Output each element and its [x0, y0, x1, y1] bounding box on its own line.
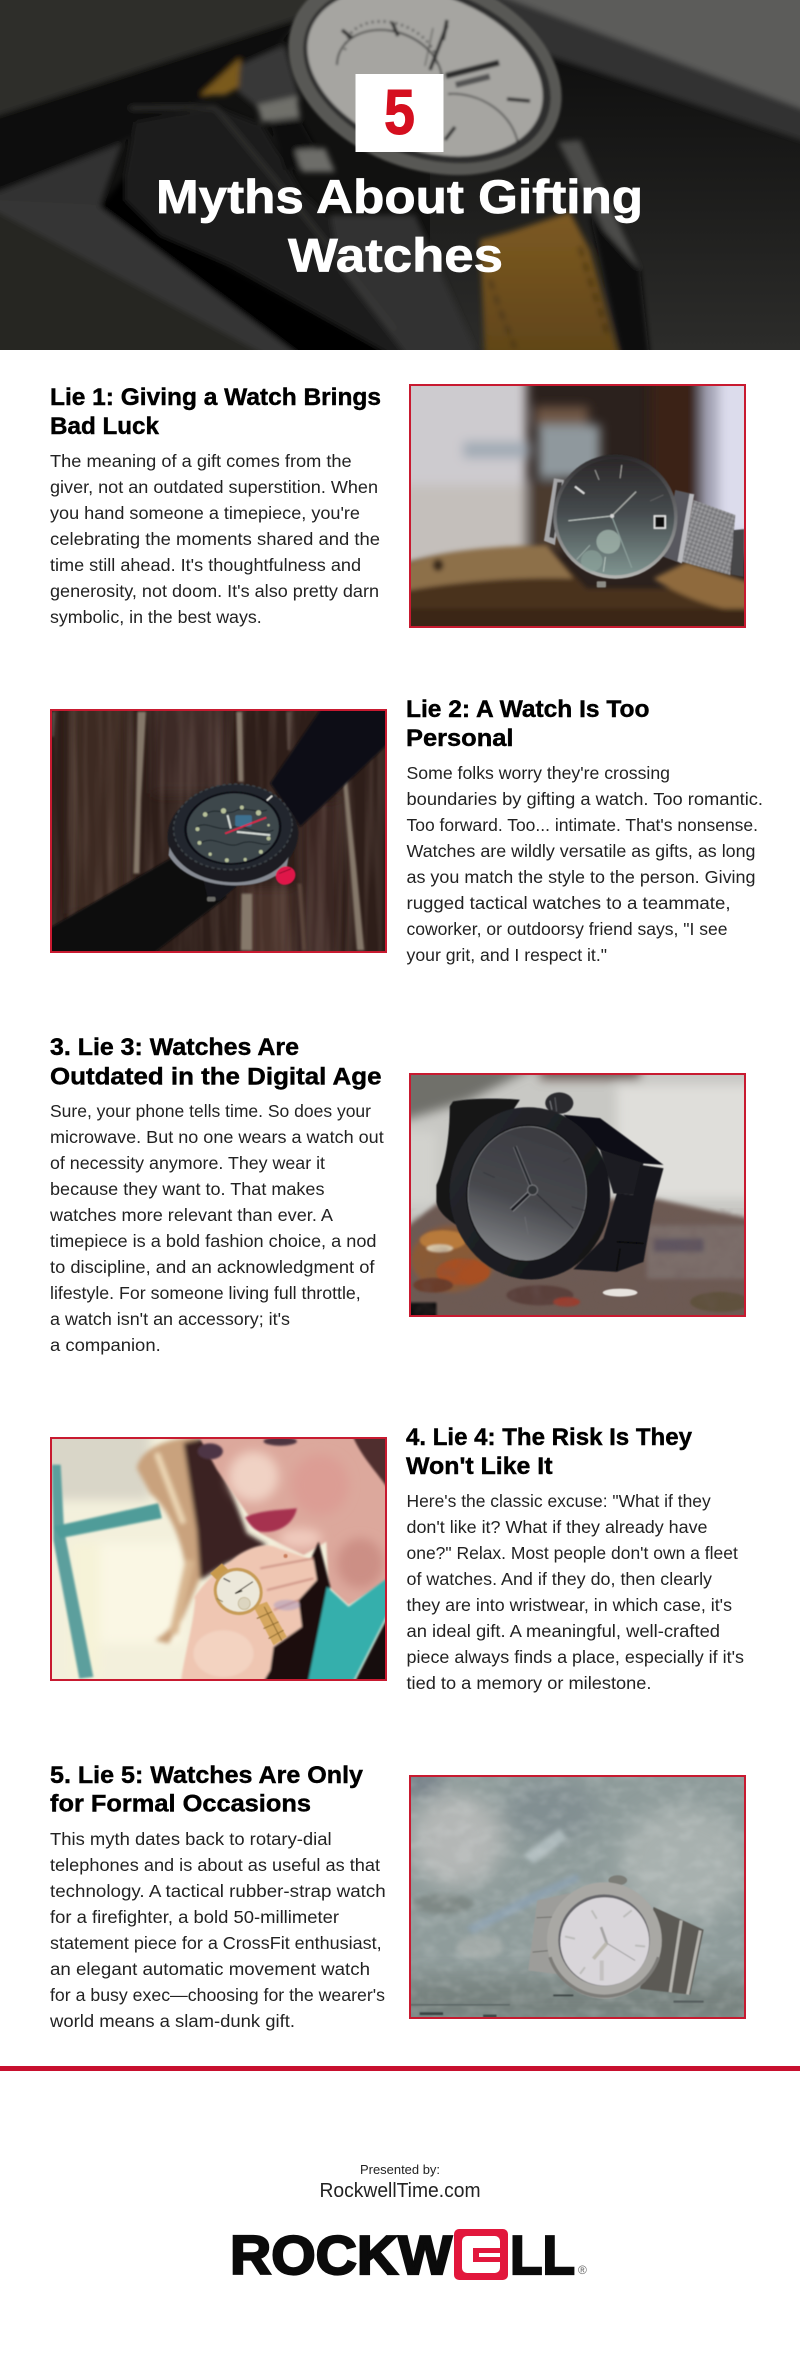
body text: lie 3 [49, 1101, 384, 1355]
body text: lie 3: microwave. But no one wears a watch out [50, 1127, 384, 1147]
heading: lie 2: Lie 2: A Watch Is Too [406, 696, 650, 723]
heading: lie 4: Won't Like It [406, 1453, 552, 1480]
heading: lie 5: 5. Lie 5: Watches Are Only [50, 1762, 363, 1789]
body text: lie 4: one?" Relax. Most people don't own a fleet [406, 1543, 738, 1563]
body text: lie 5: This myth dates back to rotary-dial [50, 1829, 332, 1849]
body text: lie 5: for a firefighter, a bold 50-millimeter [50, 1907, 339, 1927]
logo: Rockwell: ROCKW [230, 2224, 452, 2286]
heading: lie 2 [406, 696, 650, 752]
photo: tactical watch on dark wood [50, 709, 387, 953]
heading: lie 5: for Formal Occasions [50, 1790, 311, 1818]
title [156, 170, 643, 282]
panel: lie 3 [49, 1034, 757, 1355]
heading: lie 1: Lie 1: Giving a Watch Brings [50, 384, 381, 411]
body text: lie 1: The meaning of a gift comes from the [50, 451, 352, 471]
body text: lie 2: boundaries by gifting a watch. Too romantic. [406, 789, 763, 809]
body text: lie 5: technology. A tactical rubber-strap watch [50, 1881, 386, 1901]
heading: lie 3: Outdated in the Digital Age [50, 1064, 381, 1090]
body text: lie 2: Some folks worry they're crossing [406, 763, 670, 783]
photo: woman wearing gold watch [50, 1437, 387, 1681]
body text: lie 2: rugged tactical watches to a teammate, [406, 893, 730, 913]
body text: lie 1: celebrating the moments shared and the [50, 529, 380, 549]
body text: lie 3: of necessity anymore. They wear it [50, 1153, 325, 1173]
body text: lie 2 [406, 763, 763, 965]
body text: lie 3: a companion. [50, 1335, 161, 1355]
body text: lie 3: watches more relevant than ever. A [49, 1205, 333, 1225]
heading: lie 3 [50, 1034, 381, 1090]
logo: Rockwell: LL [510, 2224, 575, 2286]
heading: lie 1 [50, 384, 381, 440]
body text: lie 2: your grit, and I respect it." [406, 945, 607, 965]
photo: black watch on rusty stone [409, 1073, 746, 1317]
body text: lie 4: don't like it? What if they already have [406, 1517, 708, 1537]
body text: lie 5 [49, 1829, 386, 2031]
heading: lie 4 [406, 1424, 692, 1480]
body text: lie 3: a watch isn't an accessory; it's [50, 1309, 290, 1329]
heading: lie 3: 3. Lie 3: Watches Are [50, 1034, 299, 1061]
body text: lie 4 [406, 1491, 744, 1693]
presented by: Presented by: [360, 2162, 440, 2177]
heading: lie 4: 4. Lie 4: The Risk Is They [406, 1424, 692, 1451]
panel: footer [230, 2162, 587, 2286]
heading: lie 5 [50, 1762, 363, 1818]
body text: lie 1: you hand someone a timepiece, you're [50, 503, 360, 523]
body text: lie 1: symbolic, in the best ways. [50, 607, 262, 627]
body text: lie 4: of watches. And if they do, then clearly [406, 1569, 712, 1589]
body text: lie 3: to discipline, and an acknowledgment of [50, 1257, 375, 1277]
panel: lie 2 [40, 696, 763, 965]
panel: lie 4 [40, 1424, 744, 1693]
body text: lie 2: as you match the style to the person. Giving [406, 867, 756, 887]
body text: lie 3: lifestyle. For someone living full throttle, [50, 1283, 361, 1303]
body text: lie 2: Too forward. Too... intimate. That's nonsense. [406, 815, 758, 835]
body text: lie 4: they are into wristwear, in which case, it's [406, 1595, 732, 1615]
red divider line [0, 2066, 800, 2071]
body text: lie 4: tied to a memory or milestone. [406, 1673, 652, 1693]
body text: lie 1: time still ahead. It's thoughtfulness and [50, 555, 361, 575]
body text: lie 3: timepiece is a bold fashion choice, a nod [50, 1231, 377, 1251]
body text: lie 5: an elegant automatic movement watch [50, 1959, 370, 1979]
logo: Rockwell [230, 2224, 587, 2286]
logo: Rockwell: ® [578, 2263, 587, 2277]
body text: lie 5: world means a slam-dunk gift. [49, 2011, 295, 2031]
title: Myths About Gifting [156, 170, 643, 223]
panel: lie 5 [49, 1762, 754, 2031]
number badge: 5 [384, 76, 415, 148]
body text: lie 3: because they want to. That makes [50, 1179, 325, 1199]
body text: lie 4: an ideal gift. A meaningful, well-crafted [406, 1621, 720, 1641]
heading: lie 1: Bad Luck [50, 413, 159, 440]
body text: lie 2: Watches are wildly versatile as gifts, as long [406, 841, 756, 861]
hero photo: watch in box [0, 0, 800, 350]
website: RockwellTime.com [320, 2180, 480, 2202]
heading: lie 2: Personal [406, 725, 514, 752]
body text: lie 5: telephones and is about as useful as that [50, 1855, 380, 1875]
body text: lie 1: giver, not an outdated superstition. When [50, 477, 378, 497]
photo: watch on wood with mesh strap [409, 384, 746, 628]
body text: lie 4: Here's the classic excuse: "What if they [406, 1491, 711, 1511]
body text: lie 3: Sure, your phone tells time. So does your [50, 1101, 371, 1121]
body text: lie 5: statement piece for a CrossFit enthusiast, [50, 1933, 382, 1953]
panel: hero header [0, 0, 800, 360]
panel: lie 1 [50, 368, 760, 639]
body text: lie 1: generosity, not doom. It's also pretty darn [50, 581, 379, 601]
photo: steel watch on grey rock [409, 1775, 746, 2019]
body text: lie 2: coworker, or outdoorsy friend says, "I see [406, 919, 728, 939]
body text: lie 5: for a busy exec—choosing for the wearer's [50, 1985, 385, 2005]
number badge [356, 74, 444, 152]
body text: lie 1 [50, 451, 380, 627]
title: Watches [288, 228, 503, 282]
body text: lie 4: piece always finds a place, especially if it's [406, 1647, 744, 1667]
